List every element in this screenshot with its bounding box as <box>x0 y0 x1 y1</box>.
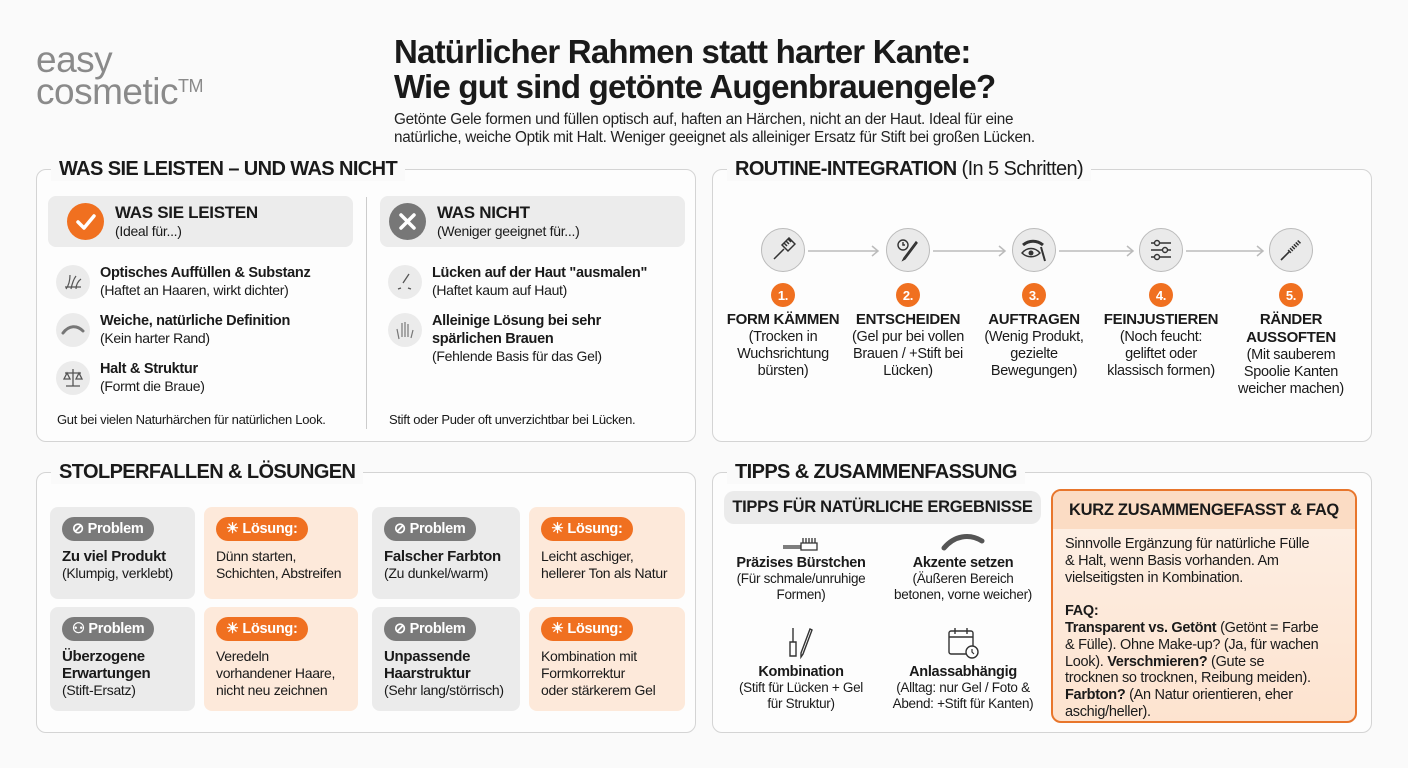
panel: stolperfallen <box>36 472 696 733</box>
card: loesung 3 <box>204 607 358 711</box>
step 2 <box>852 228 964 379</box>
card: loesung 1: Schichten, Abstreifen <box>216 565 341 581</box>
heading: TIPPS & ZUSAMMENFASSUNG <box>735 461 1017 483</box>
tip: akzente: betonen, vorne weicher) <box>894 587 1032 602</box>
icon: x <box>389 203 426 240</box>
faq text: FAQ: <box>1065 603 1098 619</box>
card: problem 4: Unpassende <box>384 648 470 665</box>
header: was sie leisten: (Ideal für...) <box>115 223 182 239</box>
step 2: Lücken) <box>883 363 933 379</box>
step 3: (Wenig Produkt, <box>984 329 1084 345</box>
tip: akzente: (Äußeren Bereich <box>912 571 1014 586</box>
card: problem 2 <box>372 507 520 599</box>
header: was sie leisten <box>48 196 353 247</box>
card: problem 2: Falscher Farbton <box>384 548 501 565</box>
item: auffuellen: Optisches Auffüllen & Substanz <box>100 265 310 281</box>
faq text: trocknen so trocknen, Reibung meiden). <box>1065 670 1311 686</box>
faq box <box>1051 489 1357 723</box>
item: auffuellen: (Haftet an Haaren, wirkt dichter) <box>100 282 289 298</box>
faq text: aschig/heller). <box>1065 704 1151 720</box>
card: loesung 3: nicht neu zeichnen <box>216 682 327 698</box>
card: problem 1: ⊘ Problem <box>72 520 144 536</box>
header: was nicht: WAS NICHT <box>437 203 530 222</box>
footer left: Gut bei vielen Naturhärchen für natürlichen Look. <box>57 412 326 427</box>
card: problem 4 <box>372 607 520 711</box>
subtitle: Getönte Gele formen und füllen optisch auf, haften an Härchen, nicht an der Haut. Ideal für eine <box>394 111 1013 128</box>
card: loesung 3: vorhandener Haare, <box>216 665 335 681</box>
card: loesung 2 <box>529 507 685 599</box>
item: auffuellen <box>56 265 310 299</box>
faq header <box>1053 491 1355 529</box>
title <box>394 33 995 105</box>
item: spaerlich: (Fehlende Basis für das Gel) <box>432 348 602 364</box>
tip: anlass: Anlassabhängig <box>909 664 1017 680</box>
card: problem 2: (Zu dunkel/warm) <box>384 565 488 581</box>
faq text: & Halt, wenn Basis vorhanden. Am <box>1065 553 1279 569</box>
card: loesung 2: hellerer Ton als Natur <box>541 565 667 581</box>
card: loesung 4: Kombination mit <box>541 648 637 664</box>
step 4: geliftet oder <box>1125 346 1197 362</box>
step 1: bürsten) <box>758 363 808 379</box>
step 3 <box>984 228 1084 379</box>
panel: routine: weicher machen) <box>1238 381 1344 397</box>
step 1 <box>727 228 839 379</box>
logo: easy <box>36 39 112 80</box>
tips header <box>724 491 1041 524</box>
faq header: KURZ ZUSAMMENGEFASST & FAQ <box>1069 501 1339 519</box>
item: luecken: (Haftet kaum auf Haut) <box>432 282 567 298</box>
tip: anlass <box>892 628 1033 711</box>
card: loesung 1: Dünn starten, <box>216 548 296 564</box>
step 4: klassisch formen) <box>1107 363 1215 379</box>
tip: akzente <box>894 534 1032 602</box>
panel: tipps <box>712 472 1372 733</box>
card: loesung 4: oder stärkerem Gel <box>541 682 655 698</box>
step 3: AUFTRAGEN <box>988 311 1080 328</box>
logo: cosmeticTM <box>36 71 203 112</box>
card: problem 3: Überzogene <box>62 648 145 665</box>
card: loesung 4 <box>529 607 685 711</box>
step 4: 4. <box>1156 288 1166 302</box>
step 3: Bewegungen) <box>991 363 1077 379</box>
card: loesung 4: ☀ Lösung: <box>551 620 623 636</box>
step 1: (Trocken in <box>749 329 817 345</box>
card: problem 3: ⚇ Problem <box>72 620 144 636</box>
footer right: Stift oder Puder oft unverzichtbar bei Lücken. <box>389 412 635 427</box>
item: definition <box>56 313 290 347</box>
card: problem 1 <box>50 507 195 599</box>
tip: buerstchen: Formen) <box>777 587 825 602</box>
faq text: Farbton? (An Natur orientieren, eher <box>1065 687 1293 703</box>
card: loesung 4: Formkorrektur <box>541 665 625 681</box>
card: problem 1: Zu viel Produkt <box>62 548 166 565</box>
tip: kombination: Kombination <box>758 664 844 680</box>
tip: buerstchen: Präzises Bürstchen <box>736 555 866 571</box>
tip: akzente: Akzente setzen <box>913 555 1013 571</box>
card: problem 3 <box>50 607 195 711</box>
item: spaerlich <box>388 313 602 364</box>
step 4 <box>1104 228 1218 379</box>
step 1: FORM KÄMMEN <box>727 311 839 328</box>
subtitle: natürliche, weiche Optik mit Halt. Weniger geeignet als alleiniger Ersatz für Stift bei großen Lücken. <box>394 129 1035 146</box>
panel: was sie leisten <box>36 169 696 442</box>
step 5: RÄNDER <box>1260 311 1322 328</box>
card: loesung 1 <box>204 507 358 599</box>
item: halt: Halt & Struktur <box>100 361 198 377</box>
faq text: Transparent vs. Getönt (Getönt = Farbe <box>1065 620 1318 636</box>
heading: STOLPERFALLEN & LÖSUNGEN <box>59 461 355 483</box>
heading: ROUTINE-INTEGRATION (In 5 Schritten) <box>735 158 1083 180</box>
tip: kombination: für Struktur) <box>767 696 835 711</box>
header: was nicht <box>380 196 685 247</box>
card: problem 4: (Sehr lang/störrisch) <box>384 682 504 698</box>
item: spaerlich: spärlichen Brauen <box>432 331 553 347</box>
step 3: 3. <box>1029 288 1039 302</box>
card: loesung 2: Leicht aschiger, <box>541 548 633 564</box>
title: Natürlicher Rahmen statt harter Kante: <box>394 33 971 70</box>
faq text: vielseitigsten in Kombination. <box>1065 570 1243 586</box>
card: problem 3: Erwartungen <box>62 665 150 682</box>
icon: check <box>67 203 104 240</box>
item: luecken: Lücken auf der Haut "ausmalen" <box>432 265 647 281</box>
faq text: & Fülle). Ohne Make-up? (Ja, für wachen <box>1065 637 1318 653</box>
tips header: TIPPS FÜR NATÜRLICHE ERGEBNISSE <box>732 498 1033 516</box>
step 1: Wuchsrichtung <box>737 346 829 362</box>
header: was sie leisten: WAS SIE LEISTEN <box>115 203 258 222</box>
item: halt: (Formt die Braue) <box>100 378 205 394</box>
card: problem 2: ⊘ Problem <box>394 520 466 536</box>
card: problem 4: Haarstruktur <box>384 665 470 682</box>
card: problem 4: ⊘ Problem <box>394 620 466 636</box>
step 1: 1. <box>778 288 788 302</box>
step 5: Spoolie Kanten <box>1244 364 1338 380</box>
step 5: 5. <box>1286 288 1296 302</box>
item: spaerlich: Alleinige Lösung bei sehr <box>432 313 601 329</box>
faq text: Sinnvolle Ergänzung für natürliche Fülle <box>1065 536 1309 552</box>
card: loesung 1: ☀ Lösung: <box>226 520 298 536</box>
card: problem 1: (Klumpig, verklebt) <box>62 565 173 581</box>
faq text <box>1065 536 1318 720</box>
item: definition: (Kein harter Rand) <box>100 330 210 346</box>
faq text: Look). Verschmieren? (Gute se <box>1065 654 1264 670</box>
tip: anlass: Abend: +Stift für Kanten) <box>893 696 1033 711</box>
logo <box>36 39 203 112</box>
step 2: ENTSCHEIDEN <box>856 311 960 328</box>
arrows <box>808 246 1264 256</box>
panel: routine <box>712 169 1372 442</box>
heading: WAS SIE LEISTEN – UND WAS NICHT <box>59 158 397 180</box>
tip: kombination <box>739 628 863 711</box>
step 4: FEINJUSTIEREN <box>1104 311 1218 328</box>
card: loesung 2: ☀ Lösung: <box>551 520 623 536</box>
step 4: (Noch feucht: <box>1120 329 1202 345</box>
item: definition: Weiche, natürliche Definition <box>100 313 290 329</box>
card: loesung 3: ☀ Lösung: <box>226 620 298 636</box>
step 2: Brauen / +Stift bei <box>853 346 963 362</box>
step 2: (Gel pur bei vollen <box>852 329 964 345</box>
card: problem 3: (Stift-Ersatz) <box>62 682 136 698</box>
item: halt <box>56 361 205 395</box>
step 3: gezielte <box>1010 346 1058 362</box>
step 5: AUSSOFTEN <box>1246 329 1336 346</box>
step 5 <box>1238 228 1344 397</box>
card: loesung 3: Veredeln <box>216 648 269 664</box>
tip: anlass: (Alltag: nur Gel / Foto & <box>896 680 1030 695</box>
item: luecken <box>388 265 647 299</box>
step 2: 2. <box>903 288 913 302</box>
step 5: (Mit sauberem <box>1247 347 1335 363</box>
tip: kombination: (Stift für Lücken + Gel <box>739 680 863 695</box>
title: Wie gut sind getönte Augenbrauengele? <box>394 68 995 105</box>
subtitle <box>394 111 1035 146</box>
tip: buerstchen <box>736 538 866 602</box>
tip: buerstchen: (Für schmale/unruhige <box>737 571 865 586</box>
header: was nicht: (Weniger geeignet für...) <box>437 223 579 239</box>
